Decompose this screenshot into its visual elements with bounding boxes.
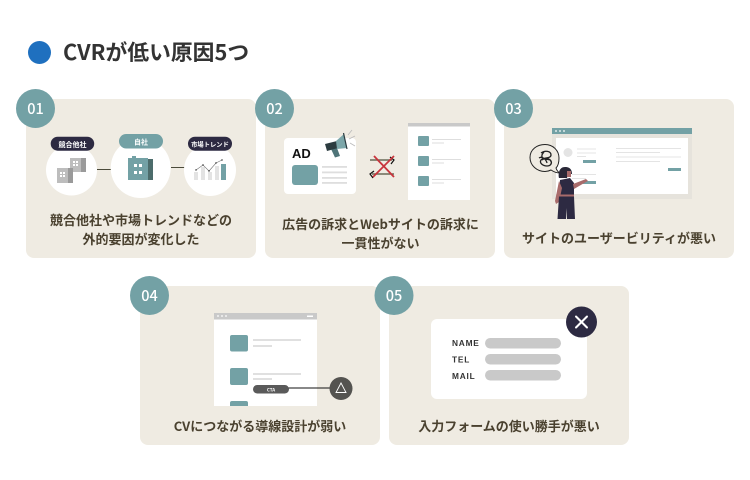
caption 05: 入力フォームの使い勝手が悪い — [418, 416, 600, 435]
badge 03: 03 — [505, 98, 522, 119]
connector lines — [97, 168, 185, 170]
website mock — [408, 123, 470, 200]
icon: megaphone — [325, 130, 355, 158]
person — [555, 167, 588, 219]
own company circle — [111, 134, 171, 198]
speech bubble with scribble — [530, 144, 560, 173]
badge 05 — [374, 276, 414, 315]
badge 04: 04 — [141, 285, 158, 306]
panel: 03 usability — [494, 89, 734, 258]
badge 04 — [130, 276, 169, 315]
ad card — [284, 138, 356, 194]
competitors circle — [46, 137, 97, 196]
own company circle: 自社 — [134, 138, 148, 148]
browser window — [552, 128, 692, 199]
form card — [431, 319, 587, 399]
CTA button with warning marker: CTA — [267, 388, 275, 394]
ad card: AD — [292, 146, 311, 161]
website mock — [214, 313, 317, 406]
caption 03: サイトのユーザービリティが悪い — [522, 228, 716, 247]
caption 01: 競合他社や市場トレンドなどの — [50, 210, 232, 229]
badge 02 — [255, 89, 294, 128]
badge 05: 05 — [386, 285, 402, 306]
badge 03 — [494, 89, 533, 128]
panel: 04 CV path — [130, 276, 380, 445]
caption 01: 外的要因が変化した — [82, 229, 200, 248]
badge 01 — [16, 89, 55, 128]
caption 02: 一貫性がない — [341, 233, 420, 252]
form card: TEL — [452, 354, 470, 364]
competitors circle: 競合他社 — [58, 140, 86, 150]
title: CVRが低い原因5つ — [63, 36, 249, 67]
form card: NAME — [452, 338, 480, 348]
caption 04: CVにつながる導線設計が弱い — [174, 416, 346, 435]
badge 02: 02 — [266, 98, 283, 119]
caption 01 — [50, 210, 232, 248]
market trend circle — [184, 137, 236, 196]
panel: 05 input form — [374, 276, 629, 445]
CTA button with warning marker — [253, 377, 352, 400]
market trend circle: 市場トレンド — [191, 140, 229, 148]
panel: 01 external factors — [16, 89, 256, 258]
form card: MAIL — [452, 371, 475, 381]
badge 01: 01 — [27, 98, 44, 119]
icon: crossed arrows — [370, 156, 394, 178]
caption 02: 広告の訴求とWebサイトの訴求に — [282, 214, 479, 233]
caption 02 — [282, 214, 479, 252]
icon: close — [566, 306, 597, 338]
panel: 02 inconsistent message — [255, 89, 495, 258]
